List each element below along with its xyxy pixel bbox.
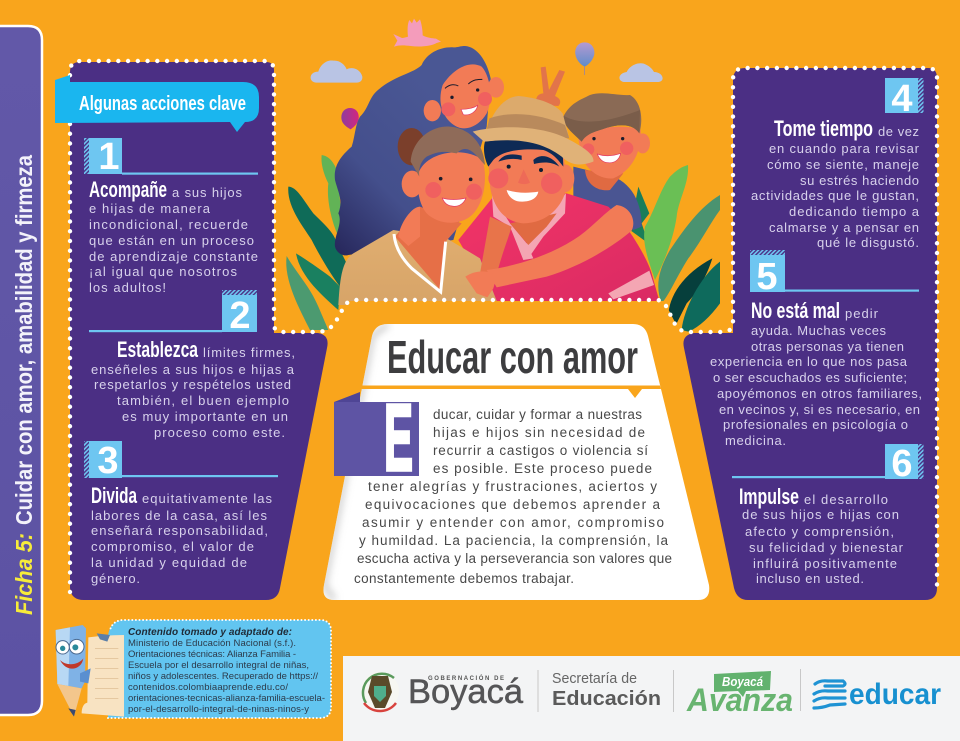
action 3: la unidad y equidad de	[91, 555, 247, 570]
logo: Boyacá Avanza: Boyacá	[722, 674, 763, 689]
action 3: género.	[91, 571, 140, 586]
orange area behind the central card	[275, 301, 733, 741]
action 4: actividades que le gustan,	[751, 188, 919, 203]
number badge 5: 5	[756, 256, 778, 298]
number badge 4: 4	[891, 78, 913, 120]
central body text	[354, 407, 672, 586]
action 6: incluso en usted.	[756, 571, 864, 586]
girl head	[424, 64, 504, 128]
source box: niños y adolescentes. Recuperado de https://	[128, 671, 318, 682]
action 2: enséñeles a sus hijos e hijas a	[91, 362, 295, 377]
number badge 5	[750, 250, 785, 298]
action 2: también, el buen ejemplo	[117, 393, 289, 408]
source box: Contenido tomado y adaptado de:	[128, 627, 292, 638]
right leaves	[630, 165, 720, 332]
logo text: Gobernación de Boyacá: Boyacá	[408, 673, 523, 711]
action 2: Establezca	[117, 337, 199, 362]
central body text: constantemente debemos trabajar.	[354, 571, 574, 586]
action 6: Impulse	[739, 484, 799, 509]
action 3	[84, 440, 278, 586]
source box: Ministerio de Educación Nacional (s.f.).	[128, 638, 296, 649]
man shirt	[458, 193, 660, 305]
panel: logo footer	[343, 656, 960, 741]
action 4: cómo se siente, maneje	[767, 157, 919, 172]
central card title: Educar con amor	[387, 331, 638, 383]
logo text: Gobernación de Boyacá: GOBERNACIÓN DE	[428, 674, 504, 682]
action 3: Divida	[91, 483, 138, 508]
action 4	[751, 78, 924, 250]
ribbon: heading	[55, 75, 259, 132]
action 5: medicina.	[725, 433, 786, 448]
logo text: Secretaría de Educación	[552, 670, 661, 710]
action 3: enseñará responsabilidad,	[91, 523, 268, 538]
action 5: No está mal	[751, 298, 840, 323]
logo: educar	[814, 678, 941, 711]
action 1: Acompañe	[89, 177, 167, 202]
action 1: incondicional, recuerde	[89, 217, 248, 232]
icon: lilac balloon	[575, 42, 594, 75]
action 5: en vecinos y, si es necesario, en	[719, 402, 920, 417]
hat	[473, 96, 593, 164]
central body text: asumir y entender con amor, compromiso	[362, 515, 664, 530]
man collar	[492, 193, 566, 260]
icon: magenta balloon	[341, 108, 359, 129]
action 4: de vez	[878, 124, 919, 139]
action 4: su estrés haciendo	[800, 173, 919, 188]
icon: right cloud	[619, 63, 663, 82]
logo text: Secretaría de Educación: Secretaría de	[552, 670, 637, 687]
logo: educar: educar	[849, 678, 941, 711]
action 4: qué le disgustó.	[817, 235, 919, 250]
woman head	[398, 127, 485, 223]
orange divider with pointer	[362, 386, 661, 398]
sleeve stripe	[608, 271, 654, 299]
central body text: y humildad. La paciencia, la comprensión, la	[359, 533, 668, 548]
source box: Escuela por el desarrollo integral de niñas,	[128, 660, 309, 671]
central body text: es posible. Este proceso puede	[433, 461, 652, 476]
number badge 3	[84, 440, 122, 482]
action 3: labores de la casa, así les	[91, 508, 268, 523]
ribbon: heading: Algunas acciones clave	[79, 93, 246, 115]
central body text: escucha activa y la perseverancia son valores que	[357, 551, 672, 566]
action 5: o ser escuchados es suficiente;	[713, 370, 907, 385]
action 3: equitativamente las	[142, 491, 272, 506]
panel: right purple background	[683, 68, 937, 600]
action 4: dedicando tiempo a	[789, 204, 920, 219]
boy head	[563, 93, 650, 190]
drop cap block	[334, 385, 419, 491]
source box: orientaciones-tecnicas-alianza-familia-escuela-	[128, 693, 325, 704]
number badge 3: 3	[97, 440, 119, 482]
man head	[484, 140, 574, 245]
woman shirt	[338, 230, 498, 305]
long blue hair	[335, 46, 491, 255]
action 5: profesionales en psicología o	[723, 417, 908, 432]
action 5: otras personas ya tienen	[751, 339, 904, 354]
arm around shoulders	[465, 205, 633, 297]
number badge 2	[222, 290, 257, 337]
panel: central white card	[323, 324, 709, 600]
number badge 4	[885, 78, 924, 120]
number badge 6	[885, 443, 924, 485]
action 4: en cuando para revisar	[769, 141, 920, 156]
action 5: experiencia en lo que nos pasa	[710, 354, 908, 369]
central body text: ducar, cuidar y formar a nuestras	[433, 407, 642, 422]
side tab: sheet title: Cuidar con amor, amabilidad y firmeza	[11, 155, 37, 525]
peace-sign hand	[536, 67, 565, 106]
action 2	[89, 290, 295, 440]
number badge 1: 1	[98, 136, 120, 178]
action 1: a sus hijos	[172, 185, 242, 200]
action 1: los adultos!	[89, 280, 166, 295]
action 6: influirá positivamente	[753, 556, 897, 571]
action 5	[710, 250, 922, 448]
side tab: sheet title	[0, 26, 42, 715]
drop cap block: E	[384, 385, 413, 491]
action 1: ¡al igual que nosotros	[89, 264, 238, 279]
number badge 1	[84, 136, 122, 178]
central body text: recurrir a castigos o violencia sí	[433, 443, 648, 458]
logo text: Secretaría de Educación: Educación	[552, 688, 661, 710]
source box: por-el-desarrollo-integral-de-ninas-ninos-y	[128, 704, 309, 715]
panel: left purple background	[70, 62, 328, 600]
action 1: de aprendizaje constante	[89, 249, 258, 264]
logo: Boyacá Avanza: Avanza	[686, 682, 793, 718]
action 2: respetarlos y respételos usted	[94, 377, 291, 392]
action 2: proceso como este.	[154, 425, 285, 440]
icon: left cloud	[311, 60, 362, 83]
source box	[108, 620, 331, 718]
action 1: e hijas de manera	[89, 201, 211, 216]
boy shirt	[573, 167, 642, 230]
action 5: pedir	[845, 306, 879, 321]
icon: pencil mascot with scroll	[56, 625, 124, 717]
action 5: ayuda. Muchas veces	[751, 323, 886, 338]
central body text: hijas e hijos sin necesidad de	[433, 425, 645, 440]
action 6: el desarrollo	[804, 492, 888, 507]
action 1: que están en un proceso	[89, 233, 254, 248]
central body text: equivocaciones que debemos aprender a	[365, 497, 660, 512]
illustration: family	[286, 19, 720, 332]
logo: Boyacá crest	[361, 672, 399, 711]
number badge 6: 6	[891, 443, 913, 485]
action 5: apoyémonos en otros familiares,	[717, 386, 922, 401]
left leaves	[286, 155, 347, 330]
action 6: afecto y comprensión,	[745, 524, 894, 539]
side tab: sheet title: Ficha 5:	[11, 533, 37, 615]
woman neck and collar	[394, 207, 462, 292]
hand on shoulder	[398, 207, 420, 246]
source box: Orientaciones técnicas: Alianza Familia -	[128, 649, 296, 660]
action 6: de sus hijos e hijas con	[742, 507, 899, 522]
central body text: tener alegrías y frustraciones, aciertos y	[368, 479, 657, 494]
action 4: calmarse y a pensar en	[769, 220, 919, 235]
action 2: límites firmes,	[203, 345, 295, 360]
dotted border	[70, 61, 937, 592]
action 4: Tome tiempo	[774, 116, 873, 141]
action 6: su felicidad y bienestar	[749, 540, 904, 555]
action 2: es muy importante en un	[122, 409, 288, 424]
source box: contenidos.colombiaaprende.edu.co/	[128, 682, 288, 693]
icon: pink bird	[393, 19, 441, 47]
action 6	[732, 443, 924, 586]
number badge 2: 2	[229, 295, 251, 337]
action 3: compromiso, el valor de	[91, 539, 254, 554]
action 1	[84, 136, 258, 295]
